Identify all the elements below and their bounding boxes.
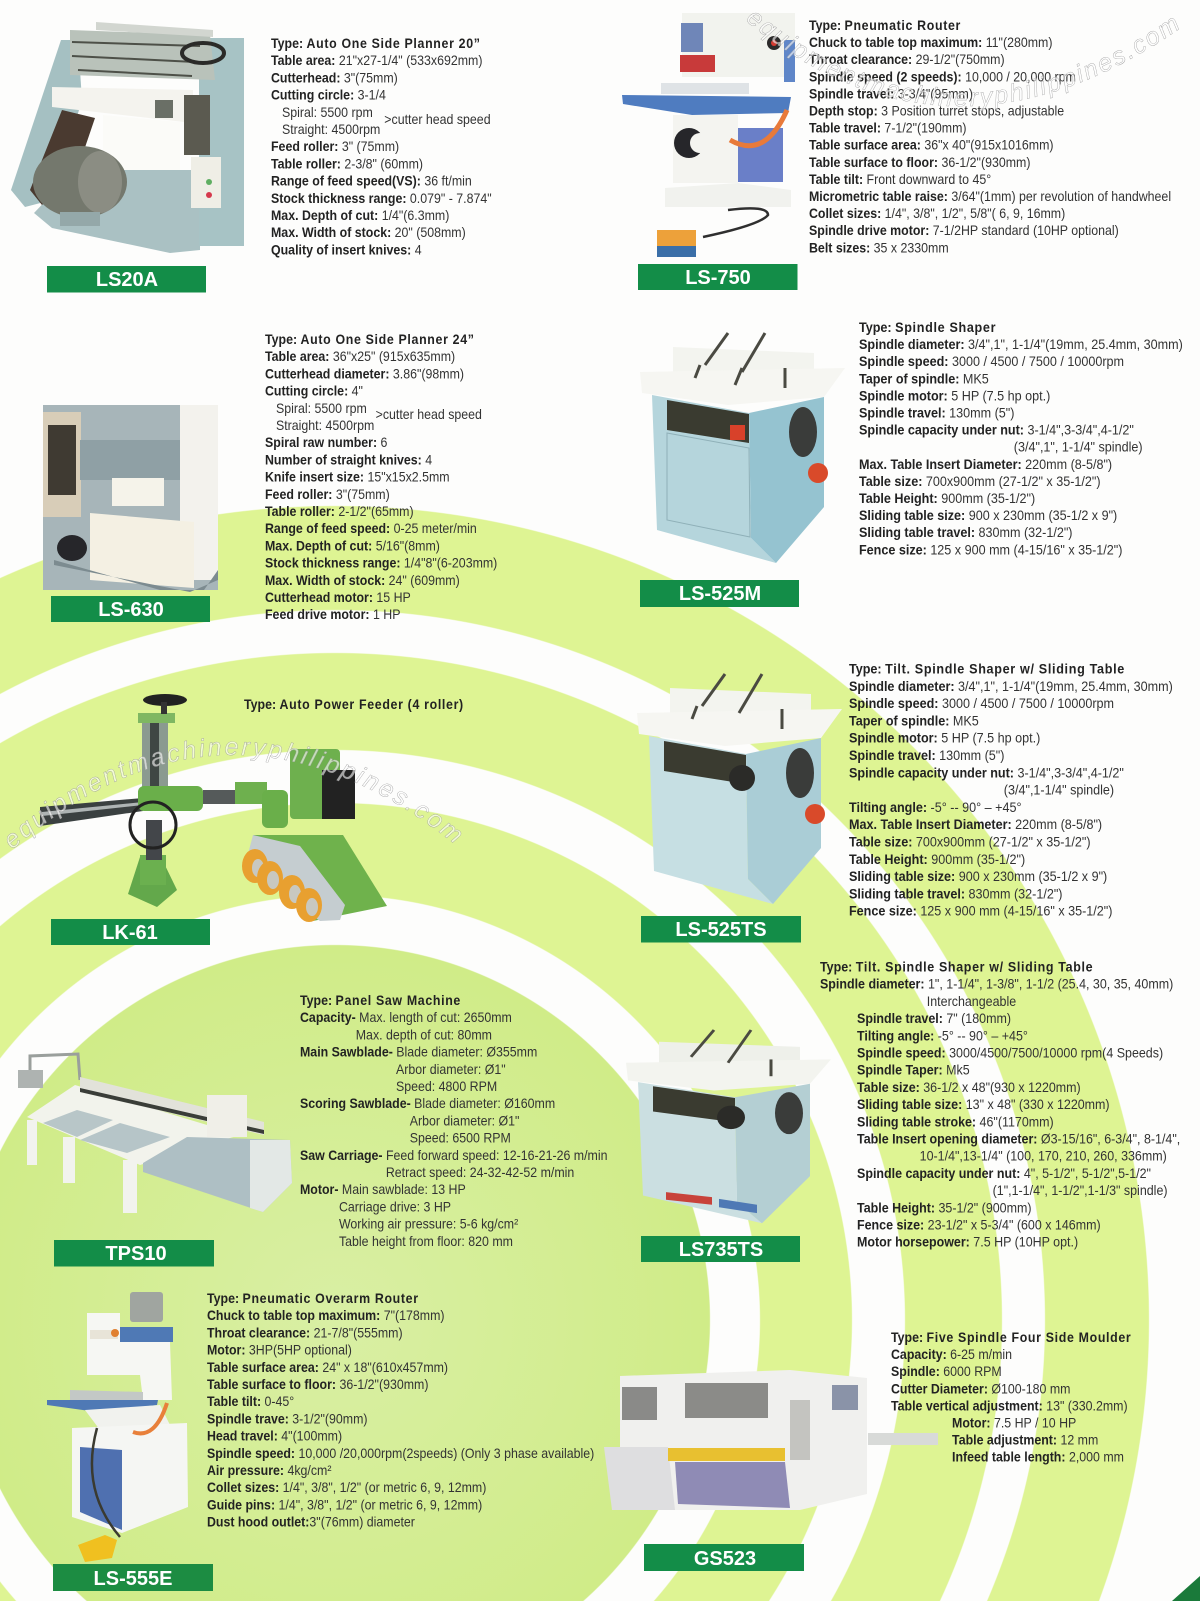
spec text: LS-750: Spindle speed (2 speeds): 10,000 / 20,000 rpm [809, 69, 1076, 84]
spec text: LS-750: Chuck to table top maximum: 11"(280mm) [809, 34, 1052, 50]
spec text: TPS10: Carriage drive: 3 HP [339, 1199, 451, 1215]
spec text: LS-630: Feed roller: 3"(75mm) [265, 486, 390, 502]
spec text: LS-525TS: Spindle motor: 5 HP (7.5 hp opt.) [849, 730, 1040, 746]
spec text: LS-525M: Spindle travel: 130mm (5") [859, 405, 1014, 421]
spec text: LS-750: Table surface to floor: 36-1/2"(930mm) [809, 154, 1030, 170]
spec text: LS735TS: Interchangeable [927, 993, 1016, 1009]
badge: LS20A [47, 266, 206, 292]
spec text: LS-525M: Taper of spindle: MK5 [859, 371, 989, 386]
spec text: LS-750: Depth stop: 3 Position turret stops, adjustable [809, 103, 1064, 119]
spec text: TPS10: Main Sawblade- Blade diameter: Ø355mm [300, 1044, 537, 1060]
spec text: LS-555E: Spindle trave: 3-1/2"(90mm) [207, 1411, 368, 1427]
spec text: LS-525M: Spindle speed: 3000 / 4500 / 7500 / 10000rpm [859, 354, 1124, 369]
spec text: LS-630: Knife insert size: 15"x15x2.5mm [265, 469, 450, 485]
badge: LS-555E: LS-555E [94, 1568, 172, 1590]
spec text: LS735TS: (1",1-1/4", 1-1/2",1-1/3" spindle) [993, 1182, 1168, 1198]
badge: LS-525M: LS-525M [679, 583, 761, 605]
spec text: LS-525M: Type: Spindle Shaper [859, 319, 996, 335]
spec text: LS735TS: Spindle Taper: Mk5 [857, 1062, 970, 1078]
icon: TPS10 machine [18, 1054, 292, 1213]
spec text: LS-750: Throat clearance: 29-1/2"(750mm) [809, 51, 1005, 67]
spec text: TPS10: Type: Panel Saw Machine [300, 992, 461, 1008]
spec text: LS-630: Cutterhead motor: 15 HP [265, 589, 411, 605]
spec text: TPS10: Table height from floor: 820 mm [339, 1233, 513, 1249]
spec text: LS-750: Spindle travel: 3-3/4"(95mm) [809, 86, 973, 102]
badge: LS735TS [641, 1236, 800, 1262]
spec text: LS735TS: Fence size: 23-1/2" x 5-3/4" (600 x 146mm) [857, 1217, 1101, 1233]
spec text: GS523 [891, 1329, 1131, 1465]
spec text: LS20A: Cutterhead: 3"(75mm) [271, 70, 398, 86]
spec text: GS523: Motor: 7.5 HP / 10 HP [952, 1415, 1076, 1431]
spec text: LS-525TS: Spindle capacity under nut: 3-1/4",3-3/4",4-1/2" [849, 765, 1124, 780]
spec text: LS735TS: Spindle capacity under nut: 4", 5-1/2", 5-1/2",5-1/2" [857, 1165, 1151, 1181]
spec text: LS20A: Type: Auto One Side Planner 20” [271, 35, 481, 51]
spec text: LS-555E: Chuck to table top maximum: 7"(178mm) [207, 1307, 445, 1323]
spec text: LS-630: Range of feed speed: 0-25 meter/min [265, 520, 477, 536]
spec text: LS20A: >cutter head speed [384, 111, 491, 127]
watermark: top right: equipmentmachineryphilippines.com [747, 12, 1179, 111]
spec text: LS-555E: Air pressure: 4kg/cm² [207, 1462, 332, 1478]
spec text: LS-525TS: Spindle travel: 130mm (5") [849, 747, 1004, 763]
spec text: LS-525TS: Sliding table size: 900 x 230mm (35-1/2 x 9") [849, 868, 1107, 884]
spec text: LS-525TS: Table Height: 900mm (35-1/2") [849, 851, 1025, 867]
spec text: LS20A: Quality of insert knives: 4 [271, 242, 422, 258]
icon: LS20A machine [11, 22, 244, 253]
spec text: TPS10: Working air pressure: 5-6 kg/cm² [339, 1216, 519, 1232]
badge: LS-525TS [641, 916, 801, 942]
spec text: LS-525TS: Tilting angle: -5° -- 90° – +45° [849, 799, 1022, 815]
badge: LK-61 [51, 919, 210, 945]
spec text: LS-525M: Fence size: 125 x 900 mm (4-15/16" x 35-1/2") [859, 542, 1122, 557]
spec text: LS-630: Number of straight knives: 4 [265, 452, 432, 468]
spec text: LS-630: Table roller: 2-1/2"(65mm) [265, 503, 414, 519]
spec text: LS-630: >cutter head speed [376, 406, 482, 422]
spec text: LS20A: Table area: 21"x27-1/4" (533x692mm) [271, 52, 482, 68]
spec text: LS735TS: Spindle speed: 3000/4500/7500/10000 rpm(4 Speeds) [857, 1045, 1163, 1061]
spec text: LS-525M: Max. Table Insert Diameter: 220mm (8-5/8") [859, 456, 1112, 472]
badge: LS-630: LS-630 [98, 599, 164, 621]
spec text: LS-750: Belt sizes: 35 x 2330mm [809, 240, 949, 255]
spec text: LS-630: Spiral: 5500 rpm [276, 400, 367, 416]
spec text: LS-630: Max. Depth of cut: 5/16"(8mm) [265, 538, 440, 554]
spec text: LS-525TS: Max. Table Insert Diameter: 220mm (8-5/8") [849, 817, 1102, 832]
badge: LS735TS: LS735TS [679, 1239, 763, 1261]
spec text: LS-630 [265, 331, 497, 622]
spec text: GS523: Spindle: 6000 RPM [891, 1363, 1002, 1379]
spec text: LS20A: Max. Width of stock: 20" (508mm) [271, 224, 466, 240]
spec text: TPS10: Capacity- Max. length of cut: 2650mm [300, 1009, 512, 1025]
spec text: LS-555E: Table surface area: 24" x 18"(610x457mm) [207, 1359, 448, 1375]
badge: LS-525TS: LS-525TS [675, 919, 767, 941]
icon: LS-630 machine [43, 405, 218, 592]
spec text: LS20A: Straight: 4500rpm [282, 121, 380, 137]
spec text: LS-750: Micrometric table raise: 3/64"(1mm) per revolution of handwheel [809, 188, 1171, 204]
spec text: LS-630: Cutterhead diameter: 3.86"(98mm) [265, 366, 464, 382]
spec text: LS735TS: Table size: 36-1/2 x 48"(930 x 1220mm) [857, 1079, 1081, 1095]
spec text: LS735TS: 10-1/4",13-1/4" (100, 170, 210, 260, 336mm) [920, 1148, 1167, 1164]
badge: LS-555E [53, 1564, 213, 1591]
spec text: LS-555E: Head travel: 4"(100mm) [207, 1428, 342, 1444]
spec text: TPS10: Motor- Main sawblade: 13 HP [300, 1181, 466, 1197]
icon: LS-525TS machine [637, 674, 842, 904]
spec text: LS735TS [820, 959, 1180, 1250]
spec text: LS-555E: Motor: 3HP(5HP optional) [207, 1342, 352, 1358]
spec text: LS735TS: Motor horsepower: 7.5 HP (10HP opt.) [857, 1234, 1078, 1250]
spec text: GS523: Table vertical adjustment: 13" (330.2mm) [891, 1398, 1128, 1414]
spec text: LS-750: Table travel: 7-1/2"(190mm) [809, 120, 967, 136]
spec text: LS-750: Table tilt: Front downward to 45° [809, 171, 991, 187]
spec text: LS-555E: Collet sizes: 1/4", 3/8", 1/2" (or metric 6, 9, 12mm) [207, 1479, 486, 1495]
icon: GS523 machine [604, 1370, 938, 1510]
spec text: LS20A: Table roller: 2-3/8" (60mm) [271, 156, 423, 172]
spec text: LS-630: Feed drive motor: 1 HP [265, 606, 401, 622]
spec text: TPS10: Speed: 4800 RPM [396, 1078, 497, 1094]
panel: LS-525TS tilting spindle shaper [637, 661, 1173, 942]
spec text: LS-525TS [849, 661, 1173, 919]
badge: GS523: GS523 [694, 1548, 756, 1570]
spec text: LS-525TS: Fence size: 125 x 900 mm (4-15/16" x 35-1/2") [849, 903, 1112, 919]
spec text: TPS10: Arbor diameter: Ø1" [410, 1113, 520, 1129]
spec text: LS-555E [207, 1290, 594, 1530]
spec text: LS735TS: Table Height: 35-1/2" (900mm) [857, 1200, 1032, 1215]
spec text: GS523: Table adjustment: 12 mm [952, 1432, 1098, 1448]
spec text: GS523: Type: Five Spindle Four Side Moulder [891, 1329, 1131, 1345]
spec text: LS-555E: Spindle speed: 10,000 /20,000rpm(2speeds) (Only 3 phase available) [207, 1445, 594, 1461]
spec text: LS20A: Feed roller: 3" (75mm) [271, 138, 399, 154]
spec text: LS-525TS: (3/4",1-1/4" spindle) [1004, 782, 1114, 798]
spec text: LS-750: Collet sizes: 1/4", 3/8", 1/2", 5/8"( 6, 9, 16mm) [809, 205, 1065, 221]
spec text: LS-525M: Spindle capacity under nut: 3-1/4",3-3/4",4-1/2" [859, 422, 1134, 438]
spec text: LS-555E: Guide pins: 1/4", 3/8", 1/2" (or metric 6, 9, 12mm) [207, 1497, 482, 1513]
spec text: LS-525M [859, 319, 1183, 557]
spec text: TPS10: Arbor diameter: Ø1" [396, 1061, 506, 1077]
spec text: TPS10: Speed: 6500 RPM [410, 1130, 511, 1146]
spec text: TPS10: Saw Carriage- Feed forward speed: 12-16-21-26 m/min [300, 1147, 607, 1163]
spec text: LS-525TS: Table size: 700x900mm (27-1/2" x 35-1/2") [849, 834, 1091, 850]
spec text: LS20A [271, 35, 492, 258]
spec text: TPS10: Max. depth of cut: 80mm [356, 1027, 492, 1043]
spec text: GS523: Cutter Diameter: Ø100-180 mm [891, 1381, 1070, 1396]
spec text: LS-630: Straight: 4500rpm [276, 417, 374, 433]
panel: TPS10 panel saw [18, 992, 607, 1266]
spec text: LS-525M: Spindle diameter: 3/4",1", 1-1/4"(19mm, 25.4mm, 30mm) [859, 336, 1183, 352]
spec text: LS-525TS: Sliding table travel: 830mm (32-1/2") [849, 886, 1062, 902]
watermark: middle left: equipmentmachineryphilippines.com [6, 738, 462, 848]
panel: LS-750 pneumatic router [622, 13, 1171, 290]
spec text: LS735TS: Sliding table stroke: 46"(1170mm) [857, 1114, 1054, 1129]
spec text: LS735TS: Sliding table size: 13" x 48" (330 x 1220mm) [857, 1096, 1110, 1112]
spec text: LS-750: Table surface area: 36"x 40"(915x1016mm) [809, 137, 1054, 153]
icon: LS-750 machine [622, 13, 795, 257]
spec text: LS-525M: Sliding table travel: 830mm (32-1/2") [859, 525, 1072, 540]
spec text: LS-525M: Table size: 700x900mm (27-1/2" x 35-1/2") [859, 473, 1101, 489]
panel: LS735TS tilting spindle shaper [626, 959, 1180, 1262]
corner: dark green triangle [1172, 1576, 1200, 1601]
spec text: LS-525M: (3/4",1", 1-1/4" spindle) [1014, 439, 1143, 455]
panel: LS-525M spindle shaper [640, 319, 1183, 607]
spec text: LS-525TS: Taper of spindle: MK5 [849, 713, 979, 729]
spec text: GS523: Capacity: 6-25 m/min [891, 1346, 1012, 1362]
spec text: LS20A: Max. Depth of cut: 1/4"(6.3mm) [271, 207, 449, 223]
spec text: LS-630: Table area: 36"x25" (915x635mm) [265, 348, 455, 364]
spec text: LS-525TS: Spindle diameter: 3/4",1", 1-1/4"(19mm, 25.4mm, 30mm) [849, 678, 1173, 694]
spec text: LS-525M: Spindle motor: 5 HP (7.5 hp opt.) [859, 388, 1050, 404]
spec text: TPS10 [300, 992, 607, 1249]
panel: LK-61 power feeder [40, 694, 464, 945]
spec text: LS-630: Spiral raw number: 6 [265, 434, 387, 450]
panel: LS-555E overarm router [47, 1290, 594, 1591]
spec text: LS-630: Max. Width of stock: 24" (609mm) [265, 572, 460, 588]
spec text: LS-750: Spindle drive motor: 7-1/2HP standard (10HP optional) [809, 222, 1119, 238]
badge: LS-750: LS-750 [685, 267, 751, 289]
spec text: LS735TS: Spindle travel: 7" (180mm) [857, 1010, 1011, 1026]
panel: LS-630 planer [43, 331, 497, 622]
spec text: LS735TS: Type: Tilt. Spindle Shaper w/ Sliding Table [820, 959, 1093, 975]
spec text: LS735TS: Spindle diameter: 1", 1-1/4", 1-3/8", 1-1/2 (25.4, 30, 35, 40mm) [820, 976, 1173, 992]
spec text: TPS10: Scoring Sawblade- Blade diameter: Ø160mm [300, 1095, 555, 1111]
spec text: LS-750 [809, 17, 1171, 255]
spec text: LS-555E: Dust hood outlet:3"(76mm) diameter [207, 1514, 415, 1530]
spec text: LS735TS: Tilting angle: -5° -- 90° – +45° [857, 1028, 1028, 1043]
spec text: LS-555E: Table tilt: 0-45° [207, 1393, 294, 1409]
panel: GS523 moulder [604, 1329, 1131, 1571]
spec text: LS20A: Spiral: 5500 rpm [282, 104, 373, 120]
icon: LS-555E machine [47, 1292, 188, 1562]
icon: LK-61 machine [40, 694, 387, 922]
spec text: LS-630: Stock thickness range: 1/4"8"(6-203mm) [265, 555, 497, 571]
spec text: LS-630: Cutting circle: 4" [265, 383, 363, 399]
spec text: LS20A: Range of feed speed(VS): 36 ft/min [271, 173, 472, 189]
badge: GS523 [644, 1544, 804, 1571]
spec text: LK-61: Type: Auto Power Feeder (4 roller) [244, 696, 464, 712]
panel: LS20A planer [11, 22, 492, 292]
badge: LS-630 [51, 596, 210, 622]
spec text: LS-555E: Type: Pneumatic Overarm Router [207, 1290, 419, 1306]
spec text: LS-555E: Throat clearance: 21-7/8"(555mm) [207, 1325, 403, 1341]
badge: LK-61: LK-61 [102, 922, 158, 944]
icon: LS-525M machine [640, 333, 845, 563]
spec text: LS20A: Cutting circle: 3-1/4 [271, 87, 386, 103]
badge: LS-750 [638, 264, 798, 290]
spec text: LS-525TS: Spindle speed: 3000 / 4500 / 7500 / 10000rpm [849, 695, 1114, 711]
spec text: LS-630: Type: Auto One Side Planner 24” [265, 331, 475, 347]
spec text: LS-555E: Table surface to floor: 36-1/2"(930mm) [207, 1376, 428, 1392]
spec text: LS-525M: Sliding table size: 900 x 230mm (35-1/2 x 9") [859, 507, 1117, 523]
badge: LS20A: LS20A [96, 269, 158, 291]
spec text: LS735TS: Table Insert opening diameter: Ø3-15/16", 6-3/4", 8-1/4", [857, 1131, 1180, 1147]
spec text: TPS10: Retract speed: 24-32-42-52 m/min [386, 1164, 574, 1180]
badge: LS-525M [640, 580, 799, 607]
badge: TPS10: TPS10 [105, 1243, 167, 1265]
badge: TPS10 [54, 1240, 214, 1266]
spec text: LS20A: Stock thickness range: 0.079" - 7.874" [271, 190, 492, 206]
spec text: LS-525M: Table Height: 900mm (35-1/2") [859, 490, 1035, 506]
icon: LS735TS machine [626, 1030, 831, 1223]
spec text: LS-525TS: Type: Tilt. Spindle Shaper w/ Sliding Table [849, 661, 1125, 677]
spec text: LS-750: Type: Pneumatic Router [809, 17, 961, 33]
spec text: GS523: Infeed table length: 2,000 mm [952, 1449, 1124, 1465]
